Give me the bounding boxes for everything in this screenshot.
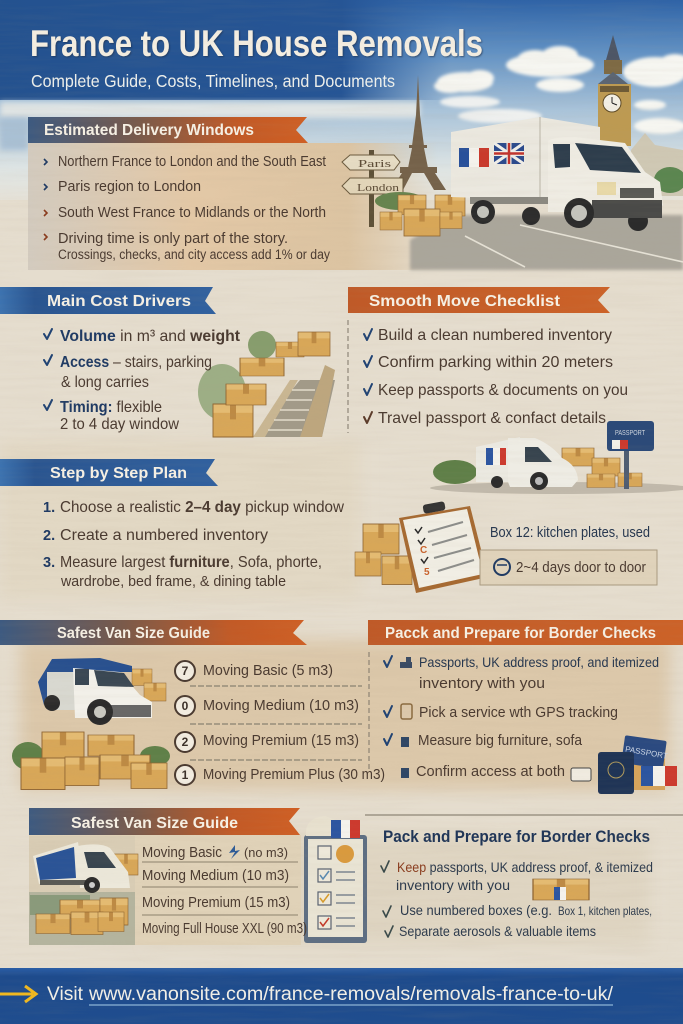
road	[410, 215, 683, 270]
panel background	[29, 835, 301, 945]
van size rows: Moving Basic	[142, 845, 222, 861]
numbered list: 7	[182, 664, 189, 678]
footer band: www.vanonsite.com/france-removals/removals-france-to-uk/	[88, 984, 614, 1005]
left image backdrop	[29, 836, 135, 896]
checklist: Confirm parking within 20 meters	[378, 354, 613, 371]
checklist	[364, 327, 628, 427]
banner: Safest Van Size Guide	[57, 625, 210, 642]
door to door callout	[480, 550, 657, 585]
icon: lorry	[33, 842, 138, 893]
divider line	[365, 814, 683, 816]
banner: Estimated Delivery Windows	[44, 122, 254, 139]
icon: Paris London signpost	[342, 150, 403, 227]
van size rows: (no m3)	[244, 845, 288, 860]
delivery list: Crossings, checks, and city access add 1% or day	[58, 247, 330, 262]
list	[381, 859, 653, 939]
hedge	[654, 167, 683, 193]
icon: passports and box	[571, 735, 677, 794]
delivery list	[44, 154, 330, 262]
footer link: Visit	[47, 984, 84, 1005]
steps: Measure largest furniture, Sofa, phorte,	[60, 554, 322, 571]
delivery truck	[451, 117, 663, 231]
banner: Step by Step Plan	[50, 465, 187, 482]
numbered list: Moving Premium Plus (30 m3)	[203, 766, 385, 783]
delivery list: Northern France to London and the South East	[58, 154, 326, 170]
cost list: Access – stairs, parking	[60, 354, 212, 371]
numbered list	[175, 661, 385, 785]
boxes group	[380, 195, 465, 236]
left image ground	[29, 892, 135, 945]
checklist: Keep passports & documents on you	[378, 382, 628, 399]
icon: passport sign	[607, 421, 654, 489]
left sky patch	[0, 118, 28, 150]
sky backdrop	[0, 0, 683, 200]
icon: small van scene	[430, 437, 683, 494]
checklist: Travel passport & confact details	[378, 410, 606, 427]
delivery list: Driving time is only part of the story.	[58, 231, 288, 247]
panel: smooth move checklist	[348, 287, 683, 494]
dashed divider	[368, 652, 370, 770]
icon: boxes on stairs	[198, 331, 335, 437]
icon: tall checklist board	[304, 816, 367, 943]
list: Box 1, kitchen plates,	[558, 904, 652, 918]
panel: main cost drivers	[0, 287, 335, 437]
numbered list: 2	[182, 735, 189, 749]
cab	[548, 137, 663, 212]
list: inventory with you	[396, 877, 510, 893]
icon: clipboard with boxes: 5	[424, 567, 430, 578]
panel: delivery windows	[28, 117, 330, 262]
cost list	[44, 328, 241, 433]
van size rows: Moving Full House XXL (90 m3)	[142, 921, 307, 937]
icon: boxes	[30, 895, 128, 934]
rear wheels	[471, 200, 648, 231]
panel background: delivery windows	[28, 143, 438, 270]
list: Separate aerosols & valuable items	[399, 923, 596, 939]
UK flag	[494, 143, 524, 164]
front wheel	[564, 198, 594, 228]
numbered list: Moving Premium (15 m3)	[203, 732, 359, 749]
panel: safest van size guide	[0, 620, 385, 790]
icon: Big Ben	[598, 35, 631, 146]
icon: Eiffel Tower	[391, 75, 446, 190]
list: Use numbered boxes (e.g.	[400, 902, 552, 918]
subtitle: Complete Guide, Costs, Timelines, and Documents	[31, 71, 395, 91]
border checks list: Pick a service wth GPS tracking	[419, 704, 618, 721]
panel: safest van size guide second	[29, 808, 301, 945]
steps: Create a numbered inventory	[60, 527, 268, 544]
banner	[0, 459, 218, 486]
border checks list: inventory with you	[419, 675, 545, 692]
heading: Pack and Prepare for Border Checks	[383, 828, 650, 846]
icon: passport sign: PASSPORT	[615, 428, 645, 437]
grille and lights	[620, 188, 654, 198]
icon: van with tarp	[38, 658, 166, 725]
steps: wardrobe, bed frame, & dining table	[60, 574, 286, 590]
banner: Safest Van Size Guide	[71, 815, 238, 832]
footer band	[0, 968, 683, 1024]
cost list: Volume in m³ and weight	[60, 328, 241, 345]
dashed divider	[347, 320, 349, 433]
numbered list: Moving Basic (5 m3)	[203, 662, 333, 679]
title: France to UK House Removals	[30, 23, 483, 64]
pale strip under header	[0, 102, 420, 118]
icon: Paris London signpost: London	[357, 183, 399, 194]
list: Keep passports, UK address proof, & itemized	[397, 859, 653, 875]
delivery list: South West France to Midlands or the North	[58, 205, 326, 221]
banner: Main Cost Drivers	[47, 293, 191, 310]
numbered list: 0	[182, 699, 189, 713]
arrow	[0, 986, 36, 1002]
van size rows: Moving Medium (10 m3)	[142, 868, 289, 884]
banner	[0, 620, 307, 645]
steps: 3.	[43, 555, 55, 571]
checklist: Build a clean numbered inventory	[378, 327, 612, 344]
bushes	[375, 192, 425, 210]
steps	[43, 499, 344, 590]
icon: Paris London signpost: Paris	[358, 159, 391, 170]
clouds	[434, 46, 683, 134]
numbered list: 1	[182, 768, 189, 782]
van size rows: Moving Premium (15 m3)	[142, 895, 290, 911]
panel: pack and prepare	[368, 620, 683, 794]
banner: Pacck and Prepare for Border Checks	[385, 625, 656, 642]
link underline	[89, 1004, 613, 1006]
border checks list: Measure big furniture, sofa	[418, 732, 583, 749]
windscreen	[575, 143, 641, 173]
banner	[0, 287, 216, 314]
banner: Smooth Move Checklist	[369, 293, 561, 310]
icon: passports and box: PASSPORT	[625, 744, 668, 761]
header blue band	[0, 0, 683, 100]
border checks list: Confirm access at both	[416, 763, 565, 780]
cost list: & long carries	[61, 374, 149, 391]
cost list: 2 to 4 day window	[60, 416, 179, 433]
border checks list: Passports, UK address proof, and itemized	[419, 654, 659, 670]
steps: 2.	[43, 528, 55, 544]
numbered list: Moving Medium (10 m3)	[203, 697, 359, 714]
road markings	[465, 225, 683, 267]
delivery list: Paris region to London	[58, 179, 201, 195]
icon: box pile	[12, 732, 170, 790]
panel: pack and prepare second	[365, 815, 683, 939]
icon: clipboard with boxes: C	[420, 545, 427, 556]
cost list: Timing: flexible	[60, 399, 162, 416]
banner	[348, 287, 610, 313]
icon: small boxes with flag	[533, 879, 589, 900]
banner	[368, 620, 683, 645]
icon: clipboard with boxes	[355, 501, 488, 593]
French flag	[459, 148, 489, 167]
banner	[29, 808, 300, 835]
box note: Box 12: kitchen plates, used	[490, 525, 650, 541]
door to door callout: 2~4 days door to door	[516, 560, 646, 576]
panel: step by step plan	[0, 459, 657, 593]
banner	[28, 117, 308, 143]
van size rows	[142, 845, 307, 937]
steps: 1.	[43, 500, 55, 516]
warm paper patches	[0, 440, 670, 945]
truck box	[451, 117, 600, 200]
background buildings	[631, 133, 683, 196]
steps: Choose a realistic 2–4 day pickup window	[60, 499, 344, 516]
border checks list	[384, 654, 659, 780]
